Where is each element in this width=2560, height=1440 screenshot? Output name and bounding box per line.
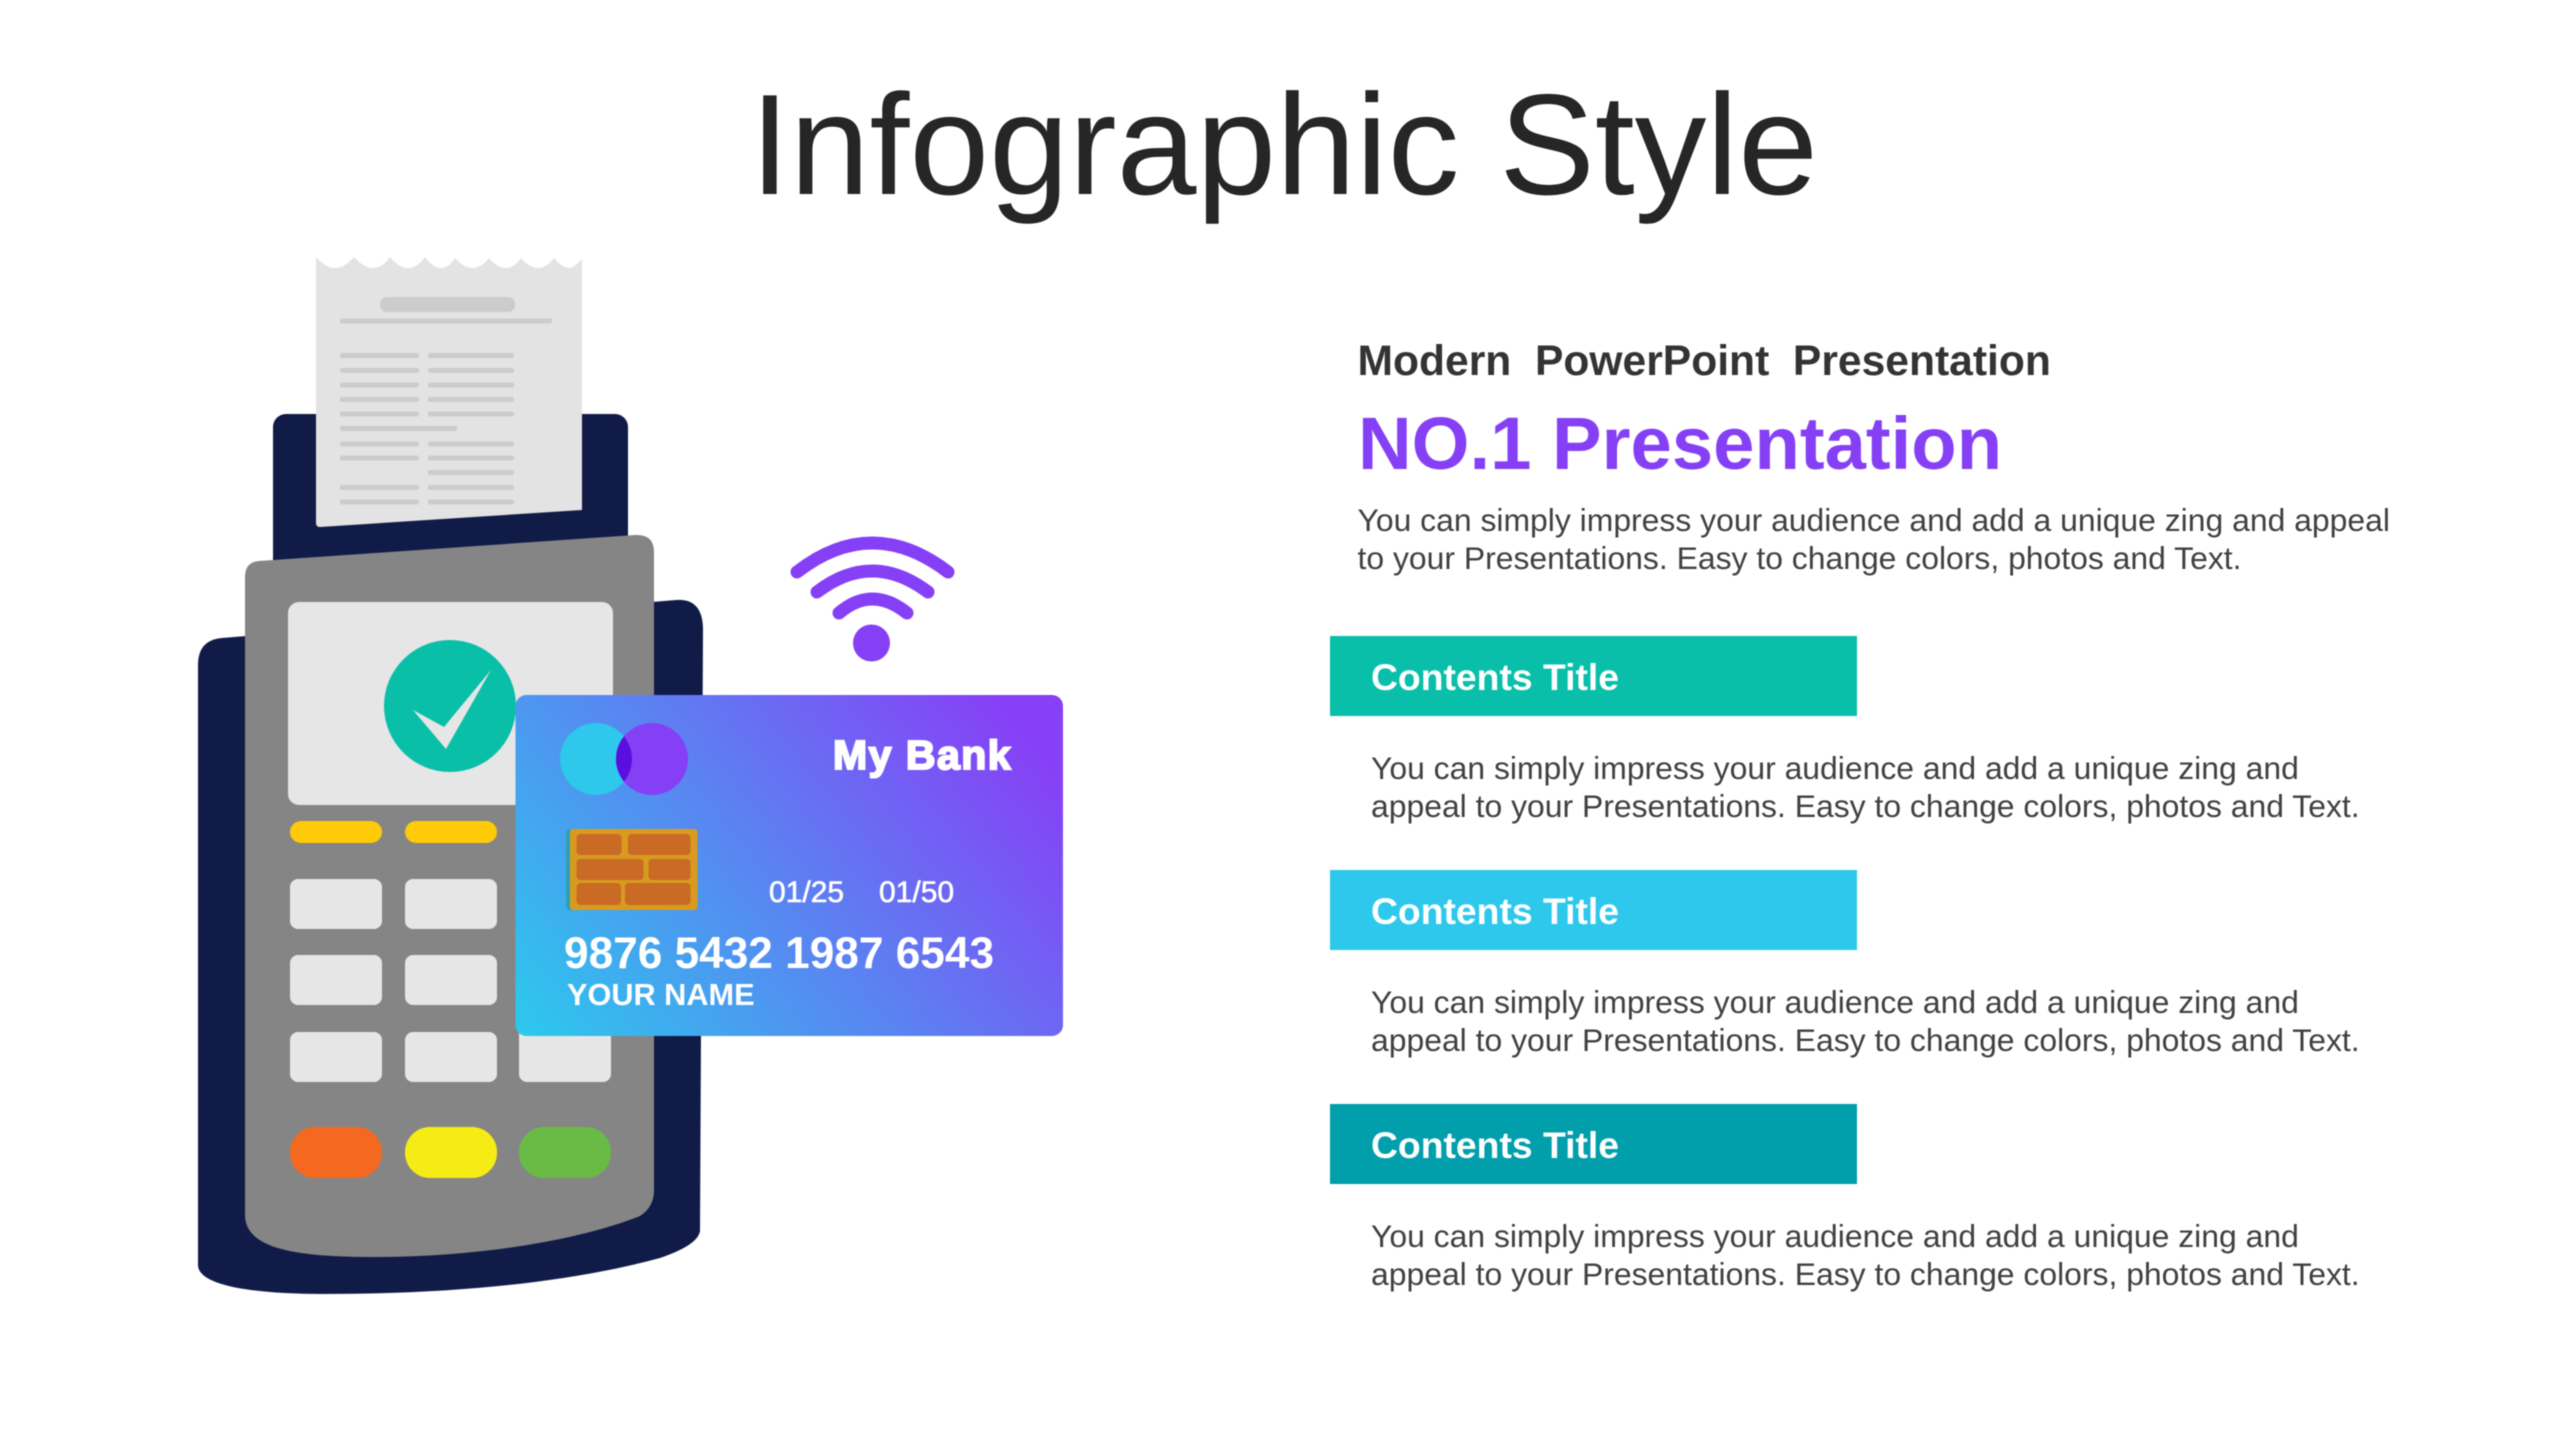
keypad bbox=[290, 879, 611, 1082]
terminal screen bbox=[288, 602, 613, 805]
heading: NO.1 Presentation bbox=[1358, 402, 2002, 485]
receipt text lines bbox=[340, 353, 514, 504]
content block 3: appeal to your Presentations. Easy to change colors, photos and Text. bbox=[1371, 1256, 2360, 1292]
content block 2 bbox=[1330, 870, 2360, 1058]
content block 3 bbox=[1330, 1104, 2360, 1292]
content block 1: You can simply impress your audience and add a unique zing and bbox=[1371, 750, 2299, 786]
icon: wifi signal bbox=[797, 543, 948, 662]
terminal navy body bbox=[198, 600, 703, 1294]
intro paragraph: to your Presentations. Easy to change colors, photos and Text. bbox=[1358, 540, 2242, 576]
content block 2: appeal to your Presentations. Easy to change colors, photos and Text. bbox=[1371, 1022, 2360, 1058]
icon: check mark bbox=[384, 640, 516, 772]
expiry dates bbox=[769, 876, 954, 909]
bank name: My Bank bbox=[833, 732, 1012, 778]
card holder name: YOUR NAME bbox=[567, 977, 755, 1012]
receipt bbox=[316, 257, 582, 527]
credit card bbox=[516, 695, 1063, 1036]
terminal grey face bbox=[245, 535, 654, 1257]
receipt header lines bbox=[340, 297, 552, 324]
title: Infographic Style bbox=[750, 65, 1818, 225]
chip bbox=[566, 829, 698, 910]
cancel, clear and confirm buttons bbox=[290, 1127, 611, 1178]
intro paragraph bbox=[1358, 502, 2390, 576]
intro paragraph: You can simply impress your audience and add a unique zing and appeal bbox=[1358, 502, 2390, 538]
subtitle: Modern PowerPoint Presentation bbox=[1358, 337, 2051, 385]
content block 3: You can simply impress your audience and add a unique zing and bbox=[1371, 1218, 2299, 1254]
expiry dates: 01/50 bbox=[879, 876, 954, 909]
illustration: payment terminal bbox=[198, 257, 703, 1294]
card network logo bbox=[560, 723, 688, 795]
terminal rear top housing bbox=[273, 414, 628, 604]
content block 3: Contents Title bbox=[1371, 1124, 1619, 1166]
intro text block bbox=[1358, 337, 2390, 576]
content block 2: You can simply impress your audience and add a unique zing and bbox=[1371, 984, 2299, 1020]
content block 1 bbox=[1330, 636, 2360, 824]
yellow function keys bbox=[290, 821, 497, 843]
expiry dates: 01/25 bbox=[769, 876, 844, 909]
content block 2: Contents Title bbox=[1371, 890, 1619, 932]
card number: 9876 5432 1987 6543 bbox=[564, 929, 994, 978]
content block 1: appeal to your Presentations. Easy to change colors, photos and Text. bbox=[1371, 788, 2360, 824]
content block 1: Contents Title bbox=[1371, 656, 1619, 698]
